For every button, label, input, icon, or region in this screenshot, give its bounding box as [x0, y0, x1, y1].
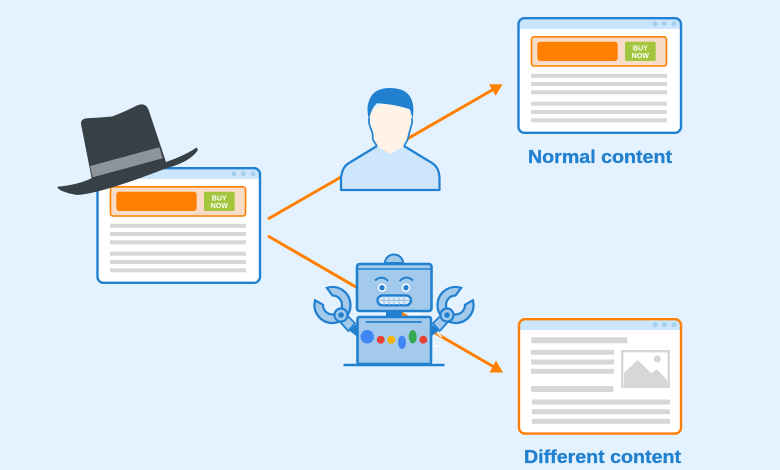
face [369, 100, 412, 154]
neck [386, 311, 402, 318]
window border [519, 319, 681, 434]
eyebrows [375, 278, 413, 281]
hair [368, 88, 413, 120]
shirt [341, 146, 440, 190]
window controls [652, 21, 676, 26]
buy now button: NOW [632, 53, 649, 60]
window title bar [98, 168, 260, 179]
hat brim [57, 148, 198, 195]
window title bar [518, 18, 681, 29]
text lines [531, 74, 667, 122]
window border [98, 168, 260, 283]
window frame [519, 319, 681, 434]
icon: robot [314, 254, 474, 365]
arrow: to normal content [268, 84, 502, 219]
glitches on arrow [408, 314, 442, 346]
browser window: normal content [518, 18, 681, 133]
window frame [98, 168, 260, 283]
icon: black hat [57, 104, 198, 195]
text lines [531, 337, 670, 424]
buy now button [204, 192, 235, 211]
browser window: different content [519, 319, 681, 434]
antenna dome [385, 254, 403, 263]
right arm [429, 287, 474, 338]
hat crown [81, 104, 167, 180]
base [344, 364, 444, 366]
ad banner [110, 187, 246, 216]
window frame [518, 18, 681, 133]
buy now button: BUY [212, 195, 227, 202]
head stripe [357, 268, 432, 270]
eyes [378, 284, 410, 292]
text lines [110, 224, 246, 272]
image placeholder [622, 351, 669, 387]
icon: person [341, 88, 440, 190]
label: normal content: Normal content [528, 147, 672, 167]
right arm link [433, 313, 450, 331]
window border [518, 18, 681, 133]
arm link [338, 313, 355, 331]
window title bar [519, 319, 681, 330]
mouth [378, 296, 411, 305]
body [358, 317, 431, 364]
right joint [440, 308, 454, 322]
left arm [314, 287, 359, 338]
window controls [232, 171, 256, 176]
browser window: cloaked page with hat [98, 168, 260, 283]
orange block [537, 42, 618, 61]
arrow: to different content [268, 236, 503, 372]
buy now button: NOW [211, 203, 228, 210]
head [357, 264, 432, 311]
right claw [438, 287, 474, 323]
buy now button: BUY [633, 45, 648, 52]
joint [334, 308, 348, 322]
label: different content: Different content [524, 447, 681, 467]
ad banner [532, 37, 666, 66]
claw [314, 287, 350, 323]
body slot [366, 321, 422, 323]
shirt outline [341, 146, 440, 190]
orange block [116, 192, 197, 211]
neck and face outline [369, 118, 412, 146]
buy now button [625, 42, 656, 61]
coloured dots [361, 330, 427, 349]
window controls [652, 322, 676, 327]
hat band [90, 147, 163, 177]
